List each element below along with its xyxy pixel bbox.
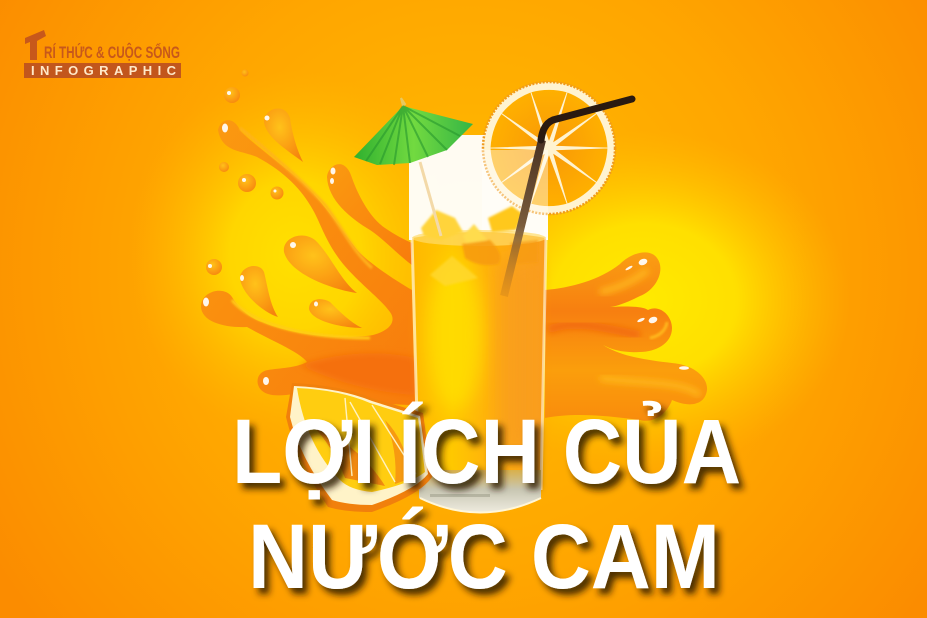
glass: juice and body [412,150,548,513]
glass: back upper part [409,135,548,240]
title line 2: NƯỚC CAM [248,505,720,608]
juice yellow glow [427,260,483,410]
logo: Tri Thuc & Cuoc Song Infographic: RÍ THỨC & CUỘC SỐNG [44,42,180,62]
orange wedge [286,383,432,512]
juice orange band [498,260,536,450]
logo: Tri Thuc & Cuoc Song Infographic: INFOGRAPHIC [31,63,177,78]
cocktail umbrella [354,98,473,236]
title [232,400,741,608]
glass base [419,470,541,513]
title line 1: LỢI ÍCH CỦA [232,400,741,503]
splash: left [201,70,415,405]
droplets [206,70,284,275]
straw [504,99,632,296]
teardrop 2 [284,236,357,293]
teardrop 3 [240,266,278,317]
teardrop 1 [264,108,303,162]
teardrop 4 [309,299,362,328]
orange slice [483,82,615,214]
highlights [203,91,336,385]
ice cubes [421,206,538,286]
splash: right [545,252,707,421]
logo: Tri Thuc & Cuoc Song Infographic [24,30,181,78]
